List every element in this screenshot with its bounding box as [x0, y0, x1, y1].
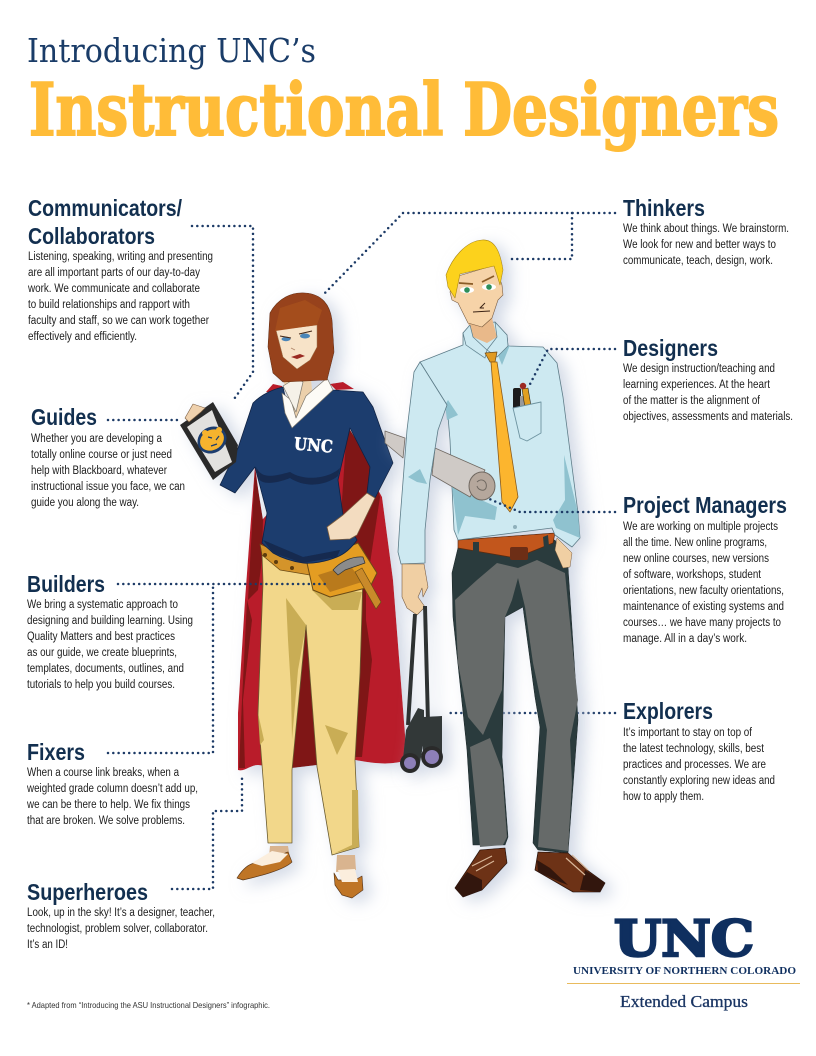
text block: explorers: constantly exploring new ideas and: [623, 775, 775, 787]
connector: designers to pens: [528, 349, 615, 388]
text block: guides: Whether you are developing a: [31, 433, 163, 445]
text block: guides: help with Blackboard, whatever: [31, 465, 167, 477]
woman: neck and collar: [282, 368, 333, 428]
text block: superheroes: It’s an ID!: [27, 939, 68, 951]
text block: thinkers: We think about things. We brainstorm.: [623, 223, 789, 235]
man: trousers: [452, 540, 578, 853]
connector: thinkers to woman head: [323, 213, 615, 295]
woman: hand on hip: [327, 493, 375, 540]
text block: designers: of the matter is the alignment of: [623, 395, 761, 407]
woman: tablet with bear logo: [180, 402, 238, 480]
text block: builders: Builders: [27, 571, 105, 597]
text block: guides: totally online course or just need: [31, 449, 172, 461]
text block: designers: learning experiences. At the heart: [623, 379, 771, 391]
text block: explorers: [623, 698, 775, 803]
connector: builders to tool belt: [118, 583, 325, 585]
text block: guides: Guides: [31, 404, 97, 430]
text block: fixers: that are broken. We solve problems.: [27, 815, 185, 827]
man: shirt shading: [445, 344, 580, 538]
text block: designers: Designers: [623, 335, 718, 361]
connector: explorers (behind figure): [450, 712, 615, 714]
text block: thinkers: communicate, teach, design, work.: [623, 255, 773, 267]
man: left arm: [398, 362, 447, 564]
text block: builders: designing and building learning. Using: [27, 615, 193, 627]
woman: cape: [238, 430, 407, 770]
text block: fixers: we can be there to help. We fix things: [26, 799, 190, 811]
illustration: woman superhero: [180, 293, 407, 898]
text block: project managers: We are working on multiple projects: [623, 521, 778, 533]
text block: communicators: Communicators/: [28, 195, 183, 221]
connector: project managers to scroll: [487, 498, 615, 512]
text block: thinkers: Thinkers: [623, 195, 705, 221]
text block: explorers: practices and processes. We are: [623, 759, 766, 771]
man: tie: [485, 352, 518, 512]
text block: superheroes: Look, up in the sky! It’s a designer, teacher,: [27, 907, 215, 919]
text block: superheroes: Superheroes: [27, 879, 148, 905]
man: hair: [446, 240, 503, 298]
text block: superheroes: [27, 879, 215, 951]
logo: UNC Extended Campus: UNC: [614, 909, 754, 968]
man: face: [450, 265, 503, 327]
text block: builders: tutorials to help you build courses.: [27, 679, 175, 691]
man: neck: [468, 318, 497, 343]
woman: right shoe: [334, 855, 363, 898]
man: shirt body: [420, 322, 580, 547]
man: collar: [463, 322, 508, 358]
man: holding hand: [402, 564, 428, 615]
woman: trouser shading: [258, 590, 362, 853]
text block: fixers: [26, 739, 198, 827]
text block: communicators: [27, 195, 213, 343]
man: trouser highlights: [455, 560, 578, 851]
text block: project managers: [623, 492, 787, 645]
man: shirt pocket with pens: [513, 383, 541, 441]
text block: fixers: Fixers: [27, 739, 85, 765]
text block: builders: Quality Matters and best practices: [27, 631, 175, 643]
illustration: man with tie: [385, 240, 605, 897]
text block: builders: [27, 571, 193, 691]
connector: fixers to builders line: [108, 584, 213, 753]
text block: project managers: orientations, new faculty orientations,: [623, 585, 784, 597]
footnote: * Adapted from “Introducing the ASU Instructional Designers” infographic.: [27, 1000, 270, 1010]
text block: communicators: effectively and efficiently.: [28, 331, 137, 343]
text block: fixers: When a course link breaks, when a: [27, 767, 180, 779]
text block: explorers: how to apply them.: [623, 791, 704, 803]
text block: project managers: Project Managers: [623, 492, 787, 518]
woman: tablet arm and sweater: [220, 387, 393, 563]
man: hand in pocket: [555, 538, 572, 568]
text block: project managers: of software, workshops, student: [623, 569, 762, 581]
title: Introducing UNC’s: [27, 31, 316, 70]
connector: guides to tablet: [108, 419, 178, 421]
text block: project managers: new online courses, new versions: [623, 553, 769, 565]
woman: hair back: [268, 293, 334, 382]
text block: superheroes: technologist, problem solver, collaborator.: [27, 923, 208, 935]
text block: thinkers: We look for new and better ways to: [623, 239, 776, 251]
title: [27, 31, 779, 152]
text block: builders: We bring a systematic approach to: [27, 599, 178, 611]
logo: UNC Extended Campus: [567, 909, 800, 1011]
text block: explorers: Explorers: [623, 698, 713, 724]
text block: guides: [31, 404, 185, 509]
logo: UNC Extended Campus: UNIVERSITY OF NORTHERN COLORADO: [573, 966, 796, 977]
text block: project managers: maintenance of existing systems and: [623, 601, 784, 613]
man: right shoe: [535, 852, 605, 892]
man: blueprint scroll: [385, 431, 495, 500]
woman: tool belt: [260, 543, 381, 609]
text block: designers: We design instruction/teaching and: [623, 363, 775, 375]
text block: thinkers: [623, 195, 789, 267]
woman: left shoe: [237, 846, 292, 880]
text block: communicators: faculty and staff, so we can work together: [28, 315, 209, 327]
text block: project managers: all the time. New online programs,: [623, 537, 767, 549]
text block: communicators: to build relationships and rapport with: [28, 299, 190, 311]
connector: thinkers to man head: [511, 213, 572, 259]
text block: explorers: the latest technology, skills, best: [623, 743, 765, 755]
connector: superheroes to cape: [172, 777, 242, 889]
text block: communicators: Listening, speaking, writing and presenting: [28, 251, 213, 263]
text block: designers: [623, 335, 793, 423]
woman: sweater logo: UNC: [293, 434, 334, 458]
man: belt: [458, 533, 555, 560]
text block: project managers: courses… we have many projects to: [623, 617, 781, 629]
text block: communicators: Collaborators: [28, 223, 155, 249]
woman: trousers: [258, 553, 363, 855]
text block: explorers: It’s important to stay on top of: [623, 727, 753, 739]
woman: face: [275, 300, 322, 369]
text block: builders: as our guide, we create blueprints,: [27, 647, 177, 659]
logo: UNC Extended Campus: Extended Campus: [620, 992, 748, 1011]
text block: communicators: are all important parts of our day-to-day: [28, 267, 200, 279]
man: binoculars: [400, 606, 443, 773]
woman: sweater shading: [256, 467, 340, 563]
connector: communicators to woman: [192, 226, 253, 402]
text block: fixers: weighted grade column doesn’t add up,: [26, 783, 198, 795]
text block: builders: templates, documents, outlines, and: [27, 663, 184, 675]
man: left shoe: [455, 848, 507, 897]
woman: cape inner shading: [239, 382, 380, 768]
text block: communicators: work. We communicate and collaborate: [27, 283, 200, 295]
man: arm shading: [408, 469, 427, 484]
text block: guides: guide you along the way.: [31, 497, 139, 509]
text block: guides: instructional issue you face, we can: [31, 481, 185, 493]
text block: project managers: manage. All in a day’s work.: [623, 633, 747, 645]
